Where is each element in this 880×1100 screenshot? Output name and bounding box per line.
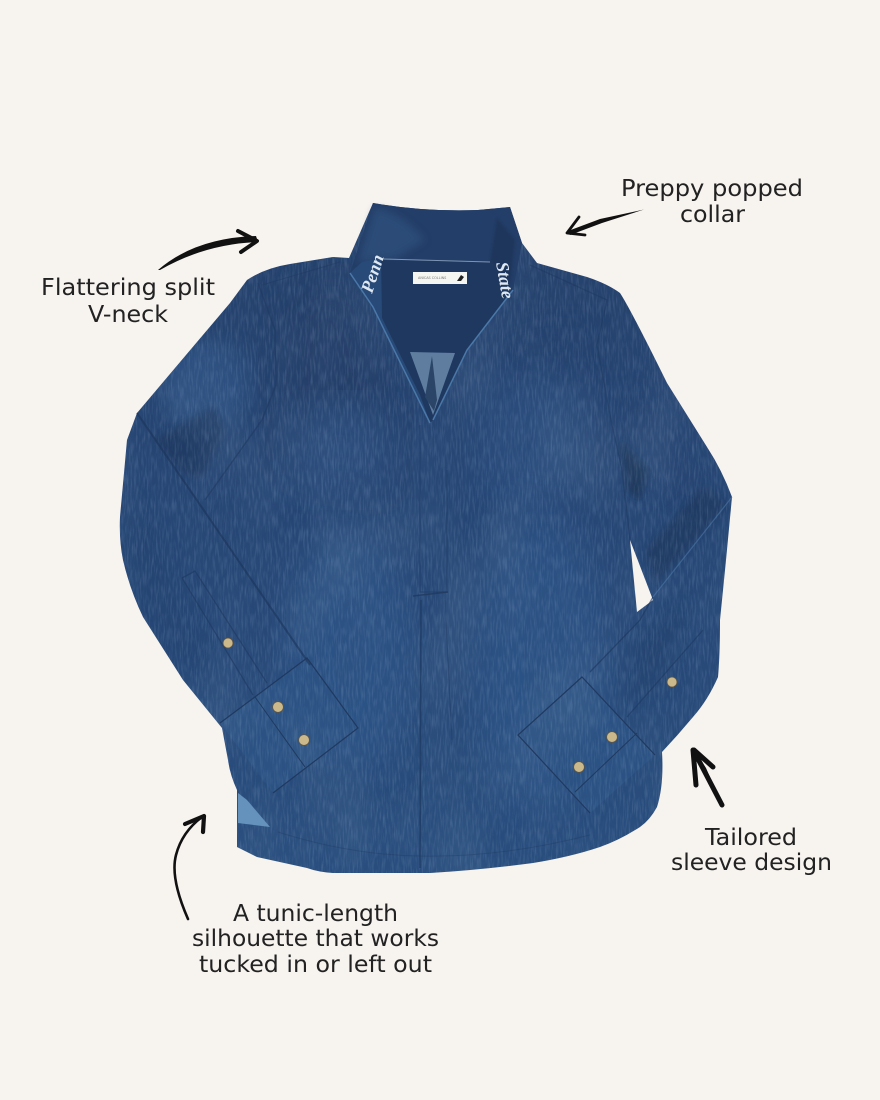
annotation: flattering split V-neck: V-neck [88, 302, 169, 328]
right lapel edge [433, 290, 513, 420]
arrow [568, 210, 644, 235]
denim texture [207, 362, 673, 834]
annotation: tunic-length silhouette: silhouette that works [192, 926, 439, 952]
annotation: tailored sleeve design [671, 750, 832, 876]
neck label: ANICAS COLLINS [418, 276, 446, 280]
embroidered collar text right: State [492, 260, 518, 300]
shoulder and armhole seams [137, 262, 732, 672]
left lapel [350, 258, 430, 423]
annotation: flattering split V-neck [41, 231, 258, 328]
label text: Tailored [704, 825, 797, 851]
buttons [223, 638, 677, 772]
arrow [696, 757, 723, 807]
label text: Flattering split [41, 275, 215, 301]
shirt silhouette [120, 203, 732, 873]
front placket [413, 425, 452, 868]
embroidered collar text left: Penn [356, 252, 388, 296]
right cuff [518, 677, 655, 813]
annotation: tunic-length silhouette [174, 816, 439, 978]
denim shading [110, 195, 740, 880]
hem details [238, 793, 590, 856]
right cuff tone [612, 717, 648, 790]
annotation: preppy popped collar: collar [680, 202, 746, 228]
left cuff [220, 658, 358, 793]
lining at side vent [238, 793, 270, 827]
annotation: preppy popped collar [567, 176, 803, 235]
left cuff tone [234, 686, 288, 778]
right sleeve placket [627, 630, 703, 717]
label text: A tunic-length [233, 901, 398, 927]
lining [410, 352, 455, 415]
shirt photo illustration [110, 195, 740, 880]
background gap between right sleeve and body [630, 540, 653, 612]
neck label [413, 272, 467, 284]
neck interior [350, 260, 513, 423]
left sleeve placket [182, 571, 267, 695]
annotation: tunic-length silhouette: tucked in or left out [199, 952, 432, 978]
arrow [158, 236, 258, 270]
label text: Preppy popped [621, 176, 803, 202]
annotation: tailored sleeve design: sleeve design [671, 850, 832, 876]
arrow [174, 817, 202, 919]
collar inner back [350, 203, 522, 290]
collar back seam [384, 259, 490, 262]
collar [350, 203, 522, 423]
pleat in lining [425, 356, 437, 411]
fold shadows [158, 407, 224, 478]
